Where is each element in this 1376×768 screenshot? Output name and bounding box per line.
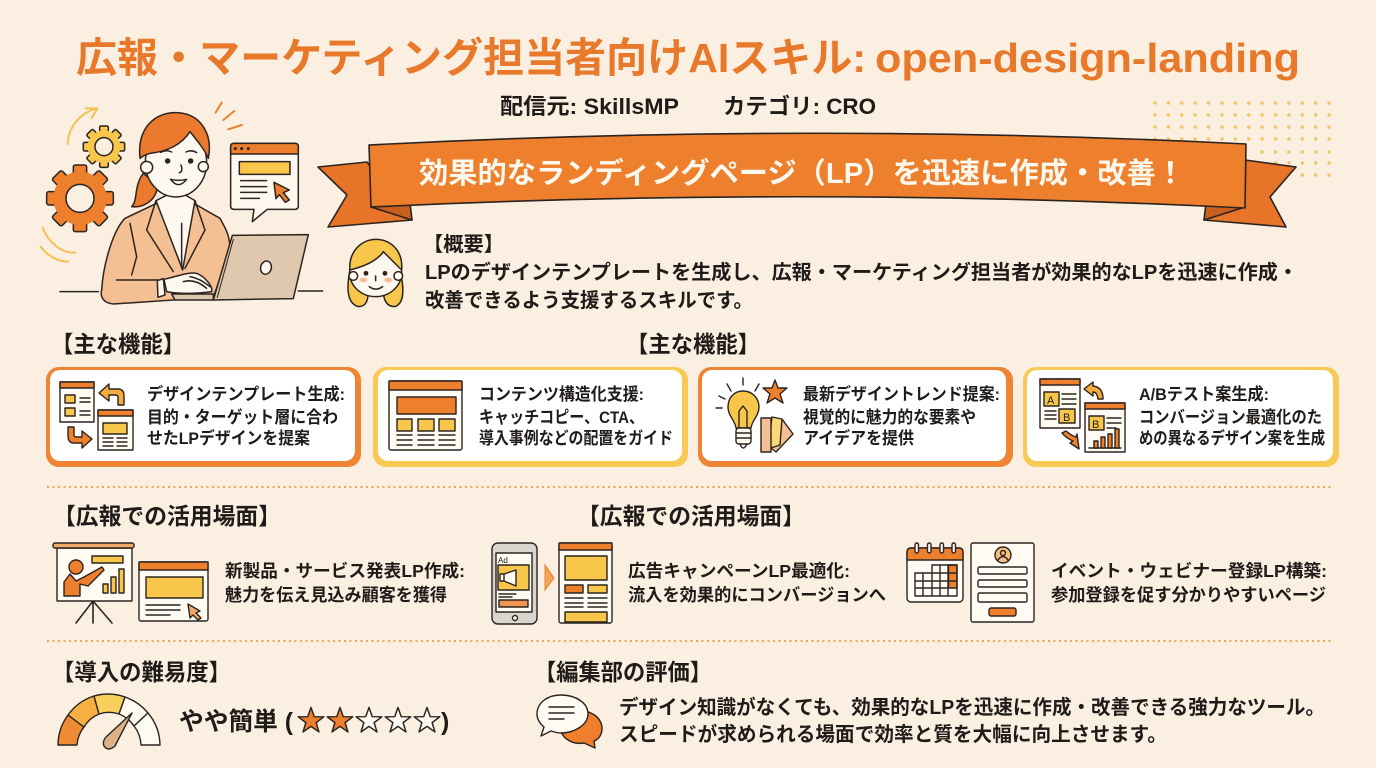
icon: landing page xyxy=(559,543,612,623)
use case: product launch xyxy=(53,543,465,623)
text: 流入を効果的にコンバージョンへ xyxy=(628,585,886,605)
card text xyxy=(1139,384,1325,448)
text: 参加登録を促す分かりやすいページ xyxy=(1051,585,1326,605)
card text: めの異なるデザイン案を生成 xyxy=(1139,428,1325,448)
card text xyxy=(147,384,345,448)
title xyxy=(76,35,1300,81)
card text: キャッチコピー、CTA、 xyxy=(479,408,644,427)
icon: speech bubbles xyxy=(537,695,602,748)
card: design trends xyxy=(698,367,1013,467)
ribbon: main band xyxy=(369,133,1246,208)
use case: ad campaign xyxy=(492,543,886,624)
card text xyxy=(803,384,1000,448)
difficulty rating xyxy=(58,694,449,749)
overview: LPのデザインテンプレートを生成し、広報・マーケティング担当者が効果的なLPを迅速に作成・ xyxy=(425,260,1298,284)
text xyxy=(225,561,465,605)
overview: 【概要】 xyxy=(423,233,504,256)
heading: editorial review: 【編集部の評価】 xyxy=(534,659,712,685)
text xyxy=(628,561,886,605)
ribbon: right tail xyxy=(1204,160,1296,227)
source and category: 配信元: SkillsMP xyxy=(500,94,679,119)
label: Ad: Ad xyxy=(498,556,508,565)
icon: page layout xyxy=(389,381,462,450)
card text: A/Bテスト案生成: xyxy=(1139,384,1269,404)
icon: registration form xyxy=(971,543,1034,622)
icon: calendar xyxy=(907,543,963,602)
figure: shirt xyxy=(156,190,195,270)
heading: features left: 【主な機能】 xyxy=(51,331,185,357)
overview: 改善できるよう支援するスキルです。 xyxy=(425,289,753,312)
icon: yellow arrow and motion arcs xyxy=(41,108,97,262)
review text: スピードが求められる場面で効率と質を大幅に向上させます。 xyxy=(619,722,1167,746)
A/B labels: B xyxy=(1063,412,1070,424)
overview xyxy=(423,233,1298,312)
card: A/B test xyxy=(1023,367,1339,467)
icon: laptop xyxy=(172,235,308,300)
banner text: 効果的なランディングページ（LP）を迅速に作成・改善！ xyxy=(419,156,1185,190)
card: content structure xyxy=(373,367,688,467)
card text: せたLPデザインを提案 xyxy=(147,428,310,448)
text: 広告キャンペーンLP最適化: xyxy=(628,561,850,581)
card text: アイデアを提供 xyxy=(803,428,914,448)
figure: jacket xyxy=(101,203,230,304)
icon: orange gear xyxy=(47,165,113,232)
heading: PR use cases right: 【広報での活用場面】 xyxy=(577,503,805,529)
title: open-design-landing xyxy=(875,35,1300,81)
icon: A/B windows xyxy=(1040,379,1125,452)
card: template generation xyxy=(46,367,361,467)
ribbon banner xyxy=(318,133,1296,227)
rating close paren: ) xyxy=(441,708,449,736)
icon: light bulb, star and swatches xyxy=(716,378,793,452)
text: イベント・ウェビナー登録LP構築: xyxy=(1051,561,1327,581)
card text: コンテンツ構造化支援: xyxy=(479,384,644,404)
A/B labels: B xyxy=(1092,419,1099,431)
desk line xyxy=(60,289,323,294)
editorial review xyxy=(537,695,1325,748)
ribbon: left tail xyxy=(318,162,412,227)
illustration: marketer with laptop and gears xyxy=(41,103,403,307)
card text: 目的・ターゲット層に合わ xyxy=(147,408,338,427)
source and category xyxy=(500,94,876,119)
icon: emphasis rays xyxy=(216,103,242,129)
figure: hand xyxy=(157,273,212,297)
card text: 視覚的に魅力的な要素や xyxy=(803,407,976,427)
ribbon: fold shadows xyxy=(371,203,1245,220)
figure: face xyxy=(161,151,197,185)
rating stars xyxy=(298,708,440,732)
card text: デザインテンプレート生成: xyxy=(147,384,345,404)
icon: presentation board xyxy=(53,543,134,623)
arrow xyxy=(545,565,554,590)
card text: コンバージョン最適化のた xyxy=(1139,408,1322,427)
source and category: カテゴリ: CRO xyxy=(723,94,876,119)
text xyxy=(1051,561,1327,605)
A/B labels: A xyxy=(1047,395,1055,407)
text: 魅力を伝え見込み顧客を獲得 xyxy=(225,585,447,605)
icon: browser speech bubble xyxy=(231,143,298,222)
A/B labels xyxy=(1047,395,1099,431)
card text: 最新デザイントレンド提案: xyxy=(803,384,1000,404)
title: 広報・マーケティング担当者向けAIスキル: xyxy=(76,35,866,81)
rating text: やや簡単 ( xyxy=(179,708,294,736)
icon: yellow gear xyxy=(83,126,125,167)
figure: hair xyxy=(140,113,209,158)
heading: difficulty: 【導入の難易度】 xyxy=(52,659,231,685)
text: 新製品・サービス発表LP作成: xyxy=(225,561,465,581)
card text xyxy=(479,384,673,448)
icon: template windows and arrows xyxy=(60,382,133,450)
icon: landing page browser xyxy=(139,562,208,621)
card text: 導入事例などの配置をガイド xyxy=(479,429,673,448)
icon: girl avatar xyxy=(348,239,403,307)
figure: ponytail xyxy=(132,173,157,207)
icon: phone with ad xyxy=(492,543,537,624)
review text xyxy=(619,695,1325,746)
heading: features right: 【主な機能】 xyxy=(626,331,760,357)
heading: PR use cases left: 【広報での活用場面】 xyxy=(53,503,281,529)
gauge xyxy=(58,694,160,749)
figure: head xyxy=(145,128,207,197)
review text: デザイン知識がなくても、効果的なLPを迅速に作成・改善できる強力なツール。 xyxy=(619,695,1325,719)
use case: event registration xyxy=(907,543,1327,622)
